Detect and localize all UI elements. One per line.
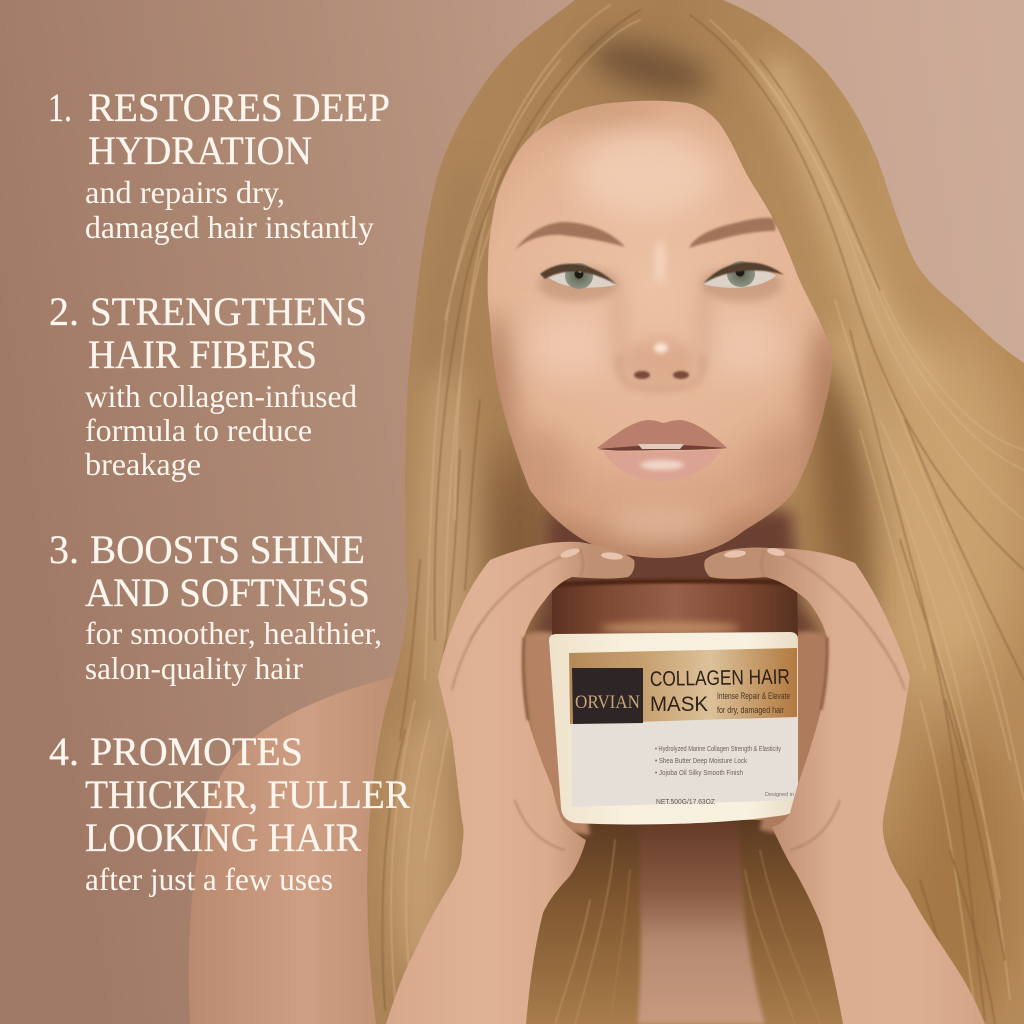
hair (350, 0, 1024, 1024)
benefit 2: with collagen-infused (85, 378, 357, 414)
product name: Intense Repair & Elevate (717, 691, 790, 701)
product name: for dry, damaged hair (717, 705, 784, 715)
benefit 4: LOOKING HAIR (85, 815, 361, 860)
eyes (538, 261, 784, 302)
benefit 2: breakage (85, 446, 201, 482)
benefit 4: after just a few uses (85, 861, 333, 897)
benefit 2: 2. (49, 289, 79, 334)
left hand and forearm (386, 542, 635, 1024)
label: gold band (569, 648, 797, 724)
lid (552, 579, 798, 636)
jar (549, 579, 798, 824)
benefit 4: 4. (49, 729, 79, 774)
benefit 3: AND SOFTNESS (85, 570, 370, 615)
shoulder (189, 672, 420, 1024)
benefit 2 (49, 289, 367, 482)
brand block: ORVIAN (575, 692, 640, 713)
hair between arms (520, 820, 850, 1024)
benefit 4: THICKER, FULLER (85, 772, 410, 817)
benefit 3: 3. (49, 527, 79, 572)
benefits list: • Shea Butter Deep Moisture Lock (655, 758, 747, 765)
benefits list: • Jojoba Oil Silky Smooth Finish (655, 770, 743, 777)
lower neck (638, 822, 765, 1024)
product name: MASK (650, 693, 708, 716)
benefit 4: PROMOTES (90, 729, 303, 774)
benefits list: • Hydrolyzed Marine Collagen Strength & Elasticity (655, 746, 781, 753)
label: white panel (571, 717, 798, 807)
benefit 2: HAIR FIBERS (88, 332, 317, 377)
benefits list (655, 746, 794, 806)
benefit 3: BOOSTS SHINE (90, 527, 365, 572)
product name (650, 666, 790, 716)
benefit 3 (49, 527, 382, 686)
benefit 2: STRENGTHENS (90, 289, 367, 334)
jar body (549, 632, 798, 824)
face (477, 101, 846, 558)
benefit 1: damaged hair instantly (85, 209, 374, 245)
benefit 1: RESTORES DEEP (88, 85, 390, 130)
nose (619, 240, 703, 389)
benefits list: NET.500G/17.63OZ (656, 797, 715, 806)
benefit 1 (48, 85, 390, 245)
palm shadows behind jar (520, 632, 830, 835)
benefit 1: HYDRATION (88, 128, 312, 173)
benefits list: Designed in (765, 792, 794, 798)
product name: COLLAGEN HAIR (650, 666, 790, 691)
neck under chin (530, 510, 826, 640)
benefit 3: for smoother, healthier, (85, 615, 382, 651)
right hand and forearm (704, 547, 985, 1024)
brand block (572, 668, 643, 724)
benefit 1: and repairs dry, (85, 174, 285, 210)
benefit 4 (49, 729, 410, 897)
benefit 3: salon-quality hair (85, 650, 303, 686)
lips (597, 420, 727, 481)
eyebrows (515, 218, 776, 250)
benefit 2: formula to reduce (85, 412, 312, 448)
benefit 1: 1. (48, 85, 72, 130)
